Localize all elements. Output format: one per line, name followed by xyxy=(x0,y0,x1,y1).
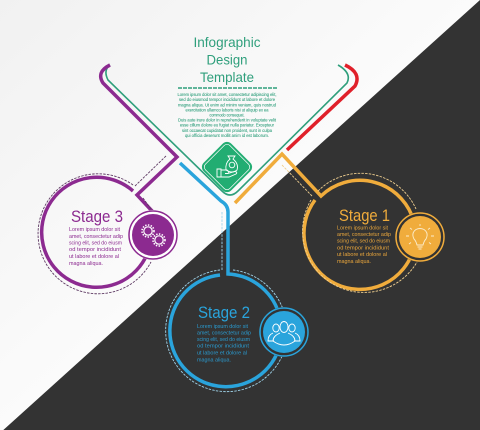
intro text block xyxy=(178,92,277,138)
stage 3 text: ut labore et dolore al xyxy=(69,254,119,260)
intro text block: magna aliqua. Ut enim ad minim veniam, quis nostrud xyxy=(178,102,276,107)
title: Template xyxy=(200,69,254,85)
stage 1 text: amet, consectetur adip xyxy=(337,232,391,238)
intro text block: sed do eiusmod tempor incididunt ut labore et dolore xyxy=(179,97,275,102)
orange connector and ring xyxy=(235,154,414,222)
stage 2 text: od tempor incididunt xyxy=(197,344,249,350)
icon: people xyxy=(259,307,309,357)
stage 2 text: Lorem ipsum dolor sit xyxy=(197,324,248,330)
stage 1 text: od tempor incididunt xyxy=(337,246,389,252)
title: Infographic xyxy=(194,34,260,50)
intro text block: sint occaecat cupidatat non proident, sunt in culpa xyxy=(182,128,272,133)
stage 3 text: amet, consectetur adip xyxy=(69,234,123,240)
intro text block: exercitation ullamco laboris nisi ut aliquip ex ea xyxy=(186,107,269,112)
panel: stage 3 xyxy=(38,65,178,294)
panel: stage 1 xyxy=(235,154,445,292)
icon: money bag in hand diamond xyxy=(199,139,255,195)
stage 3 heading: Stage 3 xyxy=(71,207,123,226)
stage 2 text: scing elit, sed do eiusm xyxy=(197,337,250,343)
stage 1 text: scing elit, sed do eiusm xyxy=(337,238,390,244)
title divider xyxy=(178,87,277,89)
stage 3 text: magna aliqua. xyxy=(69,261,103,267)
title xyxy=(194,34,260,85)
blue connector and ring xyxy=(180,163,280,318)
stage 3 text: od tempor incididunt xyxy=(69,247,121,253)
stage 1 text: Lorem ipsum dolor sit xyxy=(337,226,388,232)
intro text block: commodo consequat. xyxy=(210,113,244,118)
stage 1 text: ut labore et dolore al xyxy=(337,252,387,258)
stage 1 text: magna aliqua. xyxy=(337,259,371,265)
intro text block: qui officia deserunt mollit anim id est laborum. xyxy=(185,133,269,138)
stage 2 text xyxy=(197,324,251,364)
intro text block: Duis aute irure dolor in reprehenderit in voluptate velit xyxy=(178,118,277,123)
title: Design xyxy=(206,52,248,68)
stage 2 text: ut labore et dolore al xyxy=(197,350,247,356)
stage 2 text: amet, consectetur adip xyxy=(197,330,251,336)
green V frame xyxy=(106,65,348,195)
icon: gears xyxy=(128,210,178,260)
stage 1 text xyxy=(337,226,391,265)
stage 3 text: Lorem ipsum dolor sit xyxy=(69,227,120,233)
purple connector and ring xyxy=(101,65,177,212)
stage 2 heading: Stage 2 xyxy=(198,303,250,322)
icon: light bulb xyxy=(395,212,445,262)
intro text block: esse cillum dolore eu fugiat nulla pariatur. Excepteur xyxy=(180,123,274,128)
stage 1 heading: Stage 1 xyxy=(339,206,390,225)
red connector xyxy=(287,65,357,150)
stage 3 text xyxy=(69,227,123,267)
stage 3 text: scing elit, sed do eiusm xyxy=(69,240,122,246)
intro text block: Lorem ipsum dolor sit amet, consectetur adipiscing elit, xyxy=(178,92,276,97)
panel: stage 2 xyxy=(166,163,309,392)
stage 2 text: magna aliqua. xyxy=(197,358,231,364)
